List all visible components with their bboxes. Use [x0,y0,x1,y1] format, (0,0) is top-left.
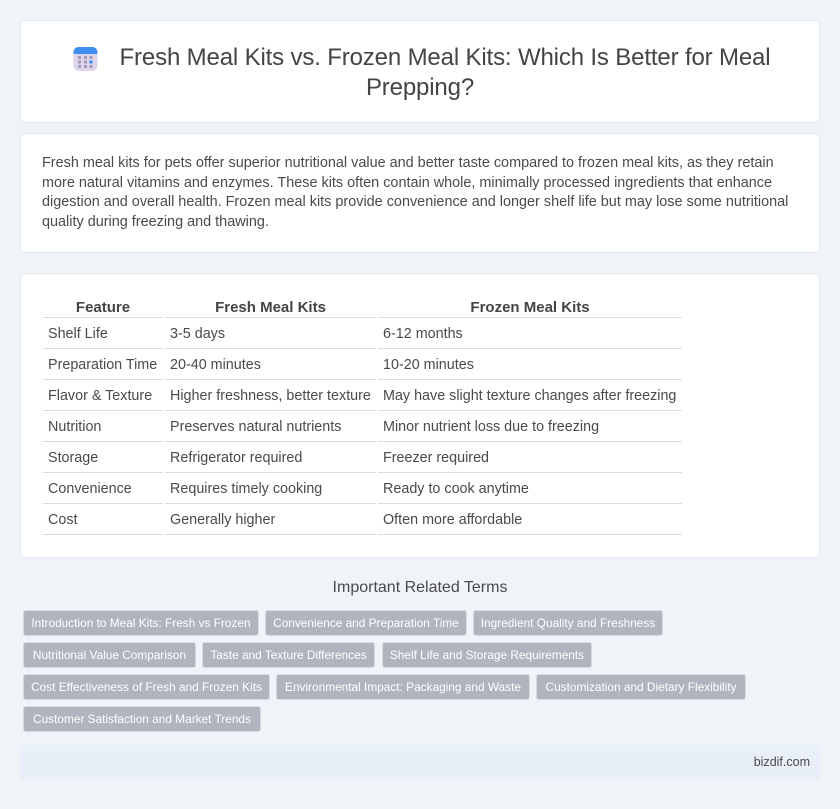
intro text: quality during freezing and thawing. [42,214,269,230]
comparison table: Generally higher [170,512,275,528]
comparison table card [20,273,820,558]
comparison table: May have slight texture changes after freezing [383,388,676,404]
comparison table: 3-5 days [170,326,225,342]
comparison table [43,299,682,535]
header card [20,20,820,123]
related terms tags: Ingredient Quality and Freshness [481,616,655,630]
comparison table: Preserves natural nutrients [170,419,341,435]
comparison table: 20-40 minutes [170,357,261,373]
title: Prepping? [366,74,474,101]
comparison table: Frozen Meal Kits [470,299,590,316]
comparison table: Refrigerator required [170,450,302,466]
related terms tags: Customization and Dietary Flexibility [546,680,736,694]
comparison table: Feature [76,299,130,316]
icon: calendar [74,47,98,71]
comparison table: Minor nutrient loss due to freezing [383,419,599,435]
comparison table: 10-20 minutes [383,357,474,373]
comparison table: Often more affordable [383,512,522,528]
related terms tags: Environmental Impact: Packaging and Waste [285,680,521,694]
title [120,44,770,101]
related terms tags: Introduction to Meal Kits: Fresh vs Frozen [31,616,251,630]
related terms heading: Important Related Terms [333,579,507,596]
comparison table: Storage [48,450,98,466]
comparison table: Ready to cook anytime [383,481,529,497]
intro text: digestion and overall health. Frozen meal kits provide convenience and longer shelf life but may lose some nutritional [42,194,788,210]
related terms tags: Taste and Texture Differences [210,648,367,662]
intro paragraph card [20,133,820,253]
intro text: more natural vitamins and enzymes. These kits often contain whole, minimally processed ingredients that enhance [42,174,772,190]
comparison table: Nutrition [48,419,101,435]
footer bar [20,745,820,779]
related terms tags: Nutritional Value Comparison [33,648,186,662]
related terms tags: Convenience and Preparation Time [273,616,459,630]
footer source: bizdif.com [754,755,810,769]
related terms tags: Customer Satisfaction and Market Trends [33,712,251,726]
comparison table: Shelf Life [48,326,108,342]
comparison table: Fresh Meal Kits [215,299,326,316]
comparison table: Preparation Time [48,357,157,373]
comparison table: Higher freshness, better texture [170,388,371,404]
related terms tags: Cost Effectiveness of Fresh and Frozen Kits [31,680,262,694]
related terms tags [23,610,746,732]
comparison table: Freezer required [383,450,489,466]
comparison table: Flavor & Texture [48,388,152,404]
intro text: Fresh meal kits for pets offer superior nutritional value and better taste compared to frozen meal kits, as they retain [42,155,774,171]
related terms tags: Shelf Life and Storage Requirements [390,648,584,662]
comparison table: Requires timely cooking [170,481,322,497]
comparison table: 6-12 months [383,326,463,342]
comparison table: Convenience [48,481,132,497]
title: Fresh Meal Kits vs. Frozen Meal Kits: Which Is Better for Meal [120,44,770,71]
intro text [42,155,788,230]
comparison table: Cost [48,512,78,528]
